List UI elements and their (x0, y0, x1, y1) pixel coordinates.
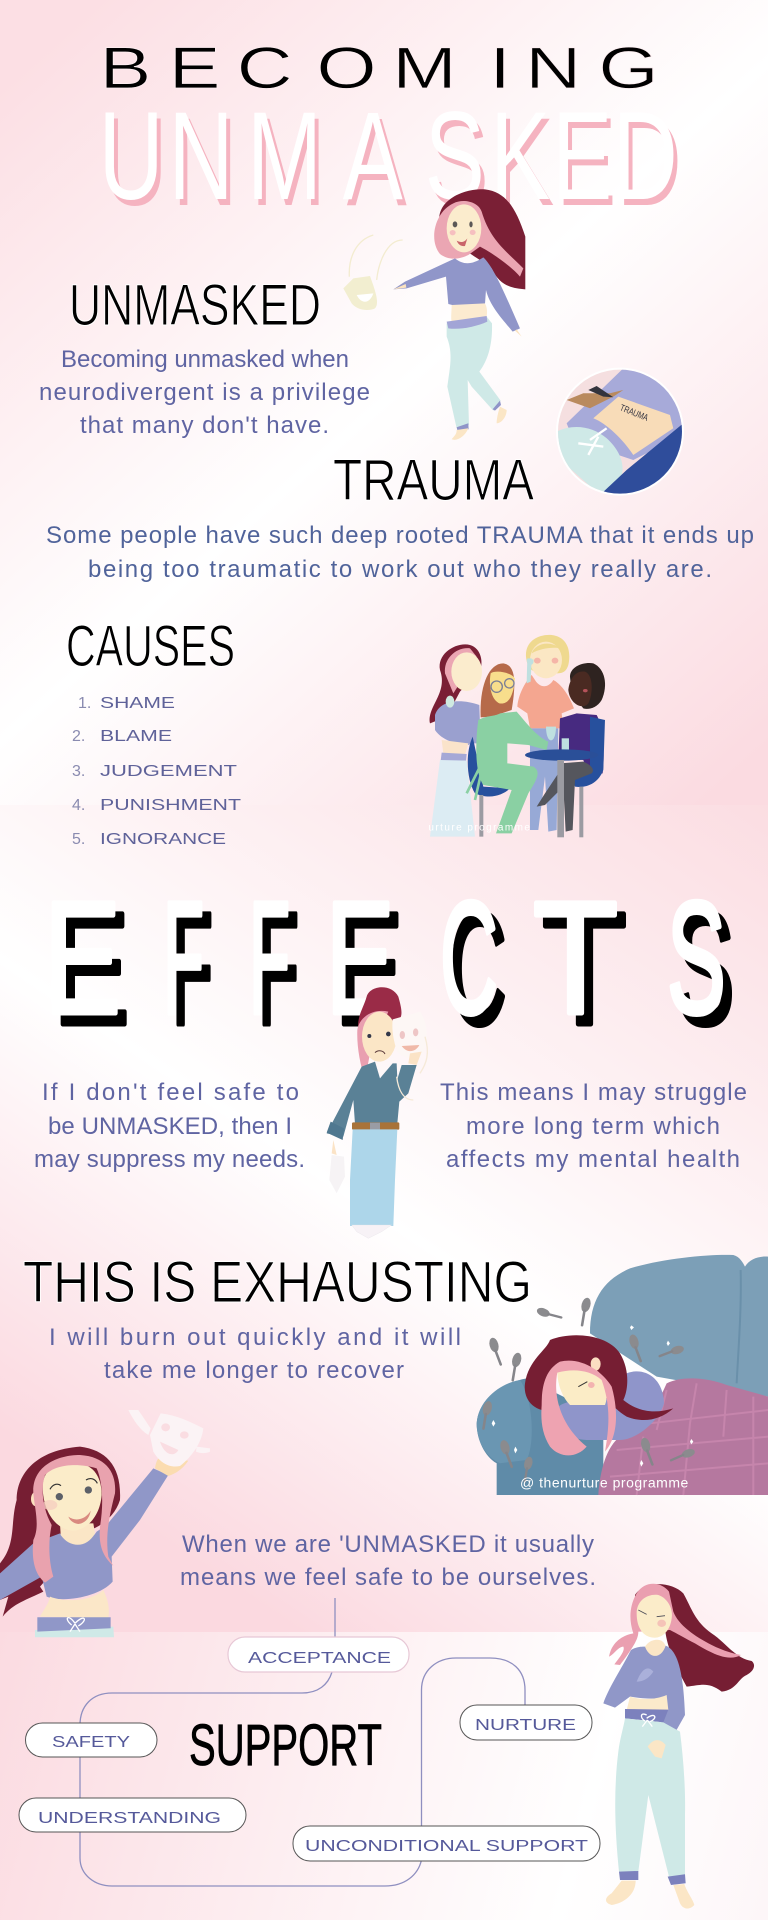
table (525, 749, 598, 761)
list: causes: 1. (78, 695, 91, 712)
mask with strings (343, 235, 403, 310)
EFFECTS black layer: E (53, 879, 130, 1058)
arms and top (0, 1468, 168, 1600)
denim shirt (327, 1062, 417, 1137)
EFFECTS black layer: E (335, 880, 403, 1059)
text: trauma explanation: Some people have such deep rooted TRAUMA that it ends up (46, 522, 754, 549)
blanket (598, 1378, 768, 1495)
pink-haired friend (430, 644, 482, 837)
text: burnout: I will burn out quickly and it will (49, 1324, 461, 1351)
hand on chest (637, 1668, 653, 1682)
list: causes: BLAME (100, 728, 172, 745)
EFFECTS white layer: T (533, 868, 618, 1047)
pill: SAFETY: SAFETY (52, 1734, 130, 1751)
chair left (468, 737, 510, 796)
pillow (558, 1371, 664, 1440)
list: causes (72, 695, 242, 848)
trousers (615, 1718, 685, 1877)
EFFECTS black layer: T (542, 879, 627, 1058)
text: trauma explanation: being too traumatic to work out who they really are. (88, 556, 712, 583)
face (362, 1012, 397, 1062)
waistband and trousers (35, 1627, 114, 1637)
list: causes: 2. (72, 728, 85, 745)
tattoo artist hand (567, 390, 623, 408)
illustration: happy girl waving mask (0, 1410, 210, 1637)
heading: EFFECTS (44, 868, 735, 1059)
lilac sweater (567, 368, 687, 460)
text: privilege statement (39, 346, 370, 439)
sparkles (492, 1325, 693, 1467)
feet (452, 407, 507, 440)
EFFECTS white layer: S (667, 869, 726, 1048)
EFFECTS black layer: S (676, 880, 735, 1059)
text: burnout (49, 1324, 461, 1384)
text: unmasked means safe: When we are 'UNMASKED it usually (182, 1531, 594, 1558)
orange-haired friend in green (467, 663, 548, 833)
illustration: girl dropping mask (343, 189, 525, 440)
text: mental health: This means I may struggle (440, 1079, 747, 1106)
face (557, 1368, 607, 1405)
illustration: trauma tattoo circle (556, 368, 687, 497)
text: suppress needs (34, 1079, 305, 1173)
watermark fragment: urture programme (428, 823, 530, 834)
hair bun (358, 987, 401, 1037)
text: suppress needs: be UNMASKED, then I (48, 1113, 292, 1140)
wine glasses (527, 659, 534, 665)
pill: UNDERSTANDING: UNDERSTANDING (38, 1810, 221, 1827)
text: mental health: more long term which (466, 1113, 720, 1140)
EFFECTS black layer: C (449, 879, 507, 1058)
ankle cuffs (619, 1871, 686, 1885)
text: mental health (440, 1079, 747, 1173)
text: unmasked means safe (180, 1531, 596, 1591)
pill: UNDERSTANDING (19, 1798, 246, 1832)
belt (352, 1122, 399, 1130)
bag and hand (332, 1140, 337, 1155)
dark-haired friend (537, 663, 605, 832)
hand (155, 1457, 188, 1476)
mask (150, 1413, 203, 1467)
feet (606, 1881, 694, 1909)
pill: SAFETY (26, 1723, 157, 1757)
EFFECTS white layer: F (163, 870, 204, 1048)
blue chair (604, 424, 682, 494)
dark hair (525, 1335, 673, 1420)
EFFECTS white layer: F (249, 870, 290, 1048)
text: privilege statement: neurodivergent is a privilege (39, 379, 370, 406)
watermark: @ thenurture programme (520, 1474, 689, 1490)
text: privilege statement: that many don't have. (80, 412, 329, 439)
shoes (352, 1225, 392, 1238)
pink hair strands (609, 1584, 741, 1665)
sofa arm and seat (477, 1378, 603, 1495)
tiny spoons (478, 1297, 696, 1482)
heading: UNMASKED: UNMASKED (69, 273, 321, 338)
illustration: girl asleep on sofa (477, 1255, 768, 1495)
text: unmasked means safe: means we feel safe to be ourselves. (180, 1564, 596, 1591)
title line: UNMASKED white: UNMASKED (99, 87, 678, 227)
mask held up (392, 1012, 427, 1058)
list: causes: JUDGEMENT (100, 763, 238, 780)
illustration: four friends at a table (428, 635, 605, 837)
illustration: calm girl with hand on chest (603, 1584, 754, 1909)
flowing hair (635, 1584, 754, 1692)
list: causes: PUNISHMENT (100, 797, 242, 814)
midriff (40, 1590, 109, 1618)
EFFECTS white layer (44, 868, 726, 1048)
pill: ACCEPTANCE (228, 1637, 409, 1672)
illustration: girl holding mask (327, 987, 427, 1238)
EFFECTS black layer (53, 879, 735, 1059)
text: trauma explanation (46, 522, 754, 583)
title line: BECOMING: BECOMING (100, 36, 658, 101)
EFFECTS white layer: E (326, 869, 394, 1048)
background: top section (0, 0, 768, 805)
skin with tattoo (593, 397, 673, 455)
connector lines (80, 1598, 525, 1886)
EFFECTS white layer: C (440, 868, 498, 1047)
heading: THIS IS EXHAUSTING: THIS IS EXHAUSTING (23, 1250, 532, 1315)
text: mental health: affects my mental health (446, 1146, 740, 1173)
crop top and arms (393, 257, 520, 332)
pill: NURTURE (460, 1705, 592, 1740)
list: causes: 3. (72, 763, 85, 780)
tattoo text: TRAUMA (618, 403, 650, 423)
list: causes: 4. (72, 797, 85, 814)
top and arms (603, 1646, 685, 1742)
EFFECTS black layer: F (172, 881, 213, 1059)
trousers (557, 427, 623, 495)
title line: UNMASKED pink shadow: UNMASKED (103, 93, 682, 233)
face (447, 204, 481, 252)
list: causes: SHAME (100, 695, 175, 712)
list: causes: 5. (72, 831, 85, 848)
list: causes: IGNORANCE (100, 831, 226, 848)
jeans (350, 1129, 397, 1226)
heading: CAUSES: CAUSES (66, 614, 235, 679)
heading: SUPPORT: SUPPORT (189, 1713, 382, 1778)
pill: ACCEPTANCE: ACCEPTANCE (248, 1650, 391, 1667)
EFFECTS white layer: E (44, 868, 121, 1047)
text: suppress needs: If I don't feel safe to (42, 1079, 299, 1106)
cuff and waistband (658, 1732, 671, 1743)
midriff (451, 303, 487, 323)
back hair (0, 1447, 120, 1617)
text: burnout: take me longer to recover (104, 1357, 404, 1384)
trousers (447, 317, 501, 428)
pill: UNCONDITIONAL SUPPORT (293, 1826, 600, 1861)
hair (439, 189, 525, 289)
background: middle section (0, 805, 768, 1632)
title (99, 36, 682, 233)
face (637, 1595, 672, 1638)
sofa back (590, 1255, 768, 1397)
pill: UNCONDITIONAL SUPPORT: UNCONDITIONAL SUPPORT (305, 1838, 588, 1855)
pink hair (541, 1361, 616, 1455)
blonde friend (517, 635, 574, 832)
heading: TRAUMA: TRAUMA (333, 448, 534, 513)
EFFECTS black layer: F (258, 881, 299, 1059)
text: privilege statement: Becoming unmasked when (61, 346, 349, 373)
pill: NURTURE: NURTURE (475, 1717, 576, 1734)
face and neck (60, 1523, 95, 1545)
background: bottom section (0, 1632, 768, 1920)
pink hair (33, 1455, 115, 1583)
text: suppress needs: may suppress my needs. (34, 1146, 305, 1173)
